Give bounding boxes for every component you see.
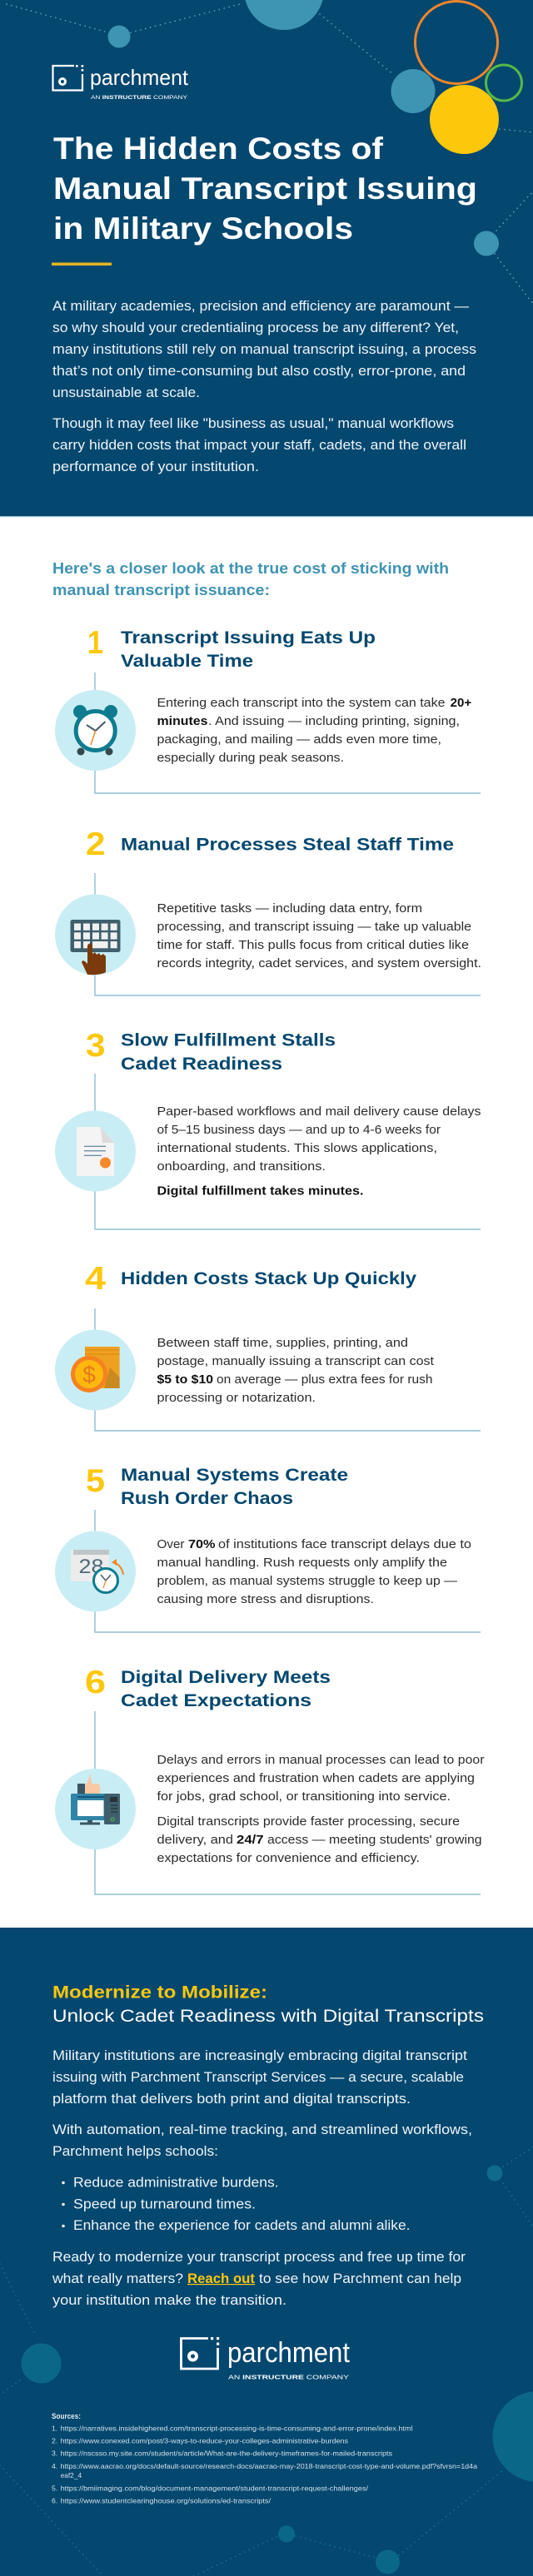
text: step 1: Entering each transcript into the system can take bbox=[157, 696, 445, 710]
panel: step 2 bbox=[55, 826, 481, 995]
heading: modernize to mobilize: Modernize to Mobilize: bbox=[52, 1983, 267, 2003]
title bbox=[53, 132, 477, 246]
text: step 6: Delays and errors in manual processes can lead to poor bbox=[157, 1753, 485, 1767]
icon: computer with thumbs up bbox=[55, 1769, 136, 1849]
panel: footer background bbox=[0, 1928, 533, 2576]
text: footer body: issuing with Parchment Transcript Services — a secure, scalable bbox=[52, 2070, 464, 2085]
text: step 3: Paper-based workflows and mail delivery cause delays bbox=[157, 1104, 481, 1119]
icon: calendar and clock bbox=[55, 1531, 136, 1611]
number 3: 3 bbox=[86, 1028, 105, 1064]
text: call to action bbox=[52, 2250, 466, 2308]
sources: 1. bbox=[52, 2425, 57, 2433]
section heading bbox=[52, 560, 449, 598]
text: step 6: experiences and frustration when cadets are applying bbox=[157, 1771, 475, 1785]
text: step 5: of institutions face transcript delays due to bbox=[218, 1537, 471, 1551]
intro text bbox=[52, 299, 476, 474]
icon: alarm clock bbox=[55, 690, 136, 771]
panel: step 3 bbox=[55, 1028, 481, 1229]
sources: 5. bbox=[52, 2484, 57, 2493]
sources: https://www.studentclearinghouse.org/solutions/ed-transcripts/ bbox=[61, 2497, 271, 2505]
sources: https://www.aacrao.org/docs/default-source/research-docs/aacrao-may-2018-transcript-cost-type-and-volume.pdf?sfvrsn=1d4a bbox=[61, 2462, 477, 2470]
bullet list: Speed up turnaround times. bbox=[73, 2197, 256, 2212]
sources: 6. bbox=[52, 2497, 57, 2505]
title: Manual Transcript Issuing bbox=[53, 171, 477, 206]
panel: step 1 bbox=[55, 625, 481, 793]
text: step 2 bbox=[157, 901, 481, 970]
intro text: At military academies, precision and efficiency are paramount — bbox=[52, 299, 470, 314]
text: step 1: packaging, and mailing — adds even more time, bbox=[157, 732, 441, 747]
logo: parchment top: AN INSTRUCTURE COMPANY bbox=[91, 96, 187, 101]
panel: step 4 bbox=[55, 1261, 481, 1431]
text: step 6 bbox=[157, 1753, 485, 1865]
heading: step 1: Valuable Time bbox=[121, 652, 253, 671]
text: step 6: access — meeting students' growing bbox=[267, 1833, 482, 1847]
sources: Sources: bbox=[52, 2412, 81, 2420]
text: footer body: With automation, real-time tracking, and streamlined workflows, bbox=[52, 2122, 472, 2137]
heading: modernize to mobilize: Unlock Cadet Readiness with Digital Transcripts bbox=[52, 2006, 484, 2026]
text: step 3 bbox=[157, 1104, 481, 1199]
intro text: unsustainable at scale. bbox=[52, 385, 200, 400]
text: step 3: of 5–15 business days — and up to 4-6 weeks for bbox=[157, 1123, 441, 1137]
panel: step 6 bbox=[55, 1665, 485, 1894]
text: step 5: manual handling. Rush requests only amplify the bbox=[157, 1556, 447, 1570]
intro text: performance of your institution. bbox=[52, 459, 259, 474]
sources: eaf2_4 bbox=[61, 2471, 82, 2479]
heading: step 5: Manual Systems Create bbox=[121, 1466, 348, 1485]
icon: keyboard and hand bbox=[55, 894, 136, 975]
icon: coins: $ bbox=[82, 1362, 96, 1387]
panel: step 5 bbox=[55, 1463, 481, 1632]
text: step 5: problem, as manual systems struggle to keep up — bbox=[157, 1574, 457, 1588]
text: step 3: Digital fulfillment takes minutes. bbox=[157, 1184, 363, 1199]
text: step 6: delivery, and bbox=[157, 1833, 233, 1847]
bullet list: Enhance the experience for cadets and alumni alike. bbox=[73, 2218, 410, 2233]
sources: 3. bbox=[52, 2449, 57, 2458]
title: in Military Schools bbox=[53, 211, 353, 246]
text: footer body: Military institutions are increasingly embracing digital transcript bbox=[52, 2048, 467, 2063]
text: step 3: international students. This slows applications, bbox=[157, 1141, 437, 1155]
intro text: many institutions still rely on manual transcript issuing, a process bbox=[52, 342, 476, 357]
title accent rule bbox=[52, 263, 112, 266]
number 4: 4 bbox=[85, 1261, 106, 1297]
sources: https://bmiimaging.com/blog/document-management/student-transcript-request-challenges/ bbox=[61, 2484, 369, 2493]
text: footer body: platform that delivers both print and digital transcripts. bbox=[52, 2092, 411, 2107]
text: step 6: 24/7 bbox=[237, 1833, 264, 1847]
heading: step 6: Digital Delivery Meets bbox=[121, 1668, 331, 1687]
heading: modernize to mobilize bbox=[52, 1983, 484, 2026]
icon: coins bbox=[55, 1330, 136, 1410]
text: step 4: processing or notarization. bbox=[157, 1391, 316, 1405]
sources bbox=[52, 2412, 477, 2505]
section heading: Here's a closer look at the true cost of sticking with bbox=[52, 560, 449, 577]
text: step 1 bbox=[157, 696, 471, 765]
heading: step 4: Hidden Costs Stack Up Quickly bbox=[121, 1269, 416, 1288]
title: The Hidden Costs of bbox=[53, 132, 384, 166]
text: step 6: for jobs, grad school, or transitioning into service. bbox=[157, 1789, 451, 1804]
text: step 3: onboarding, and transitions. bbox=[157, 1159, 326, 1174]
intro text: so why should your credentialing process be any different? Yet, bbox=[52, 320, 459, 335]
text: step 1: minutes bbox=[157, 714, 208, 728]
text: step 6: Digital transcripts provide faster processing, secure bbox=[157, 1814, 460, 1829]
text: step 6: expectations for convenience and efficiency. bbox=[157, 1851, 420, 1865]
heading: step 5: Rush Order Chaos bbox=[121, 1489, 293, 1508]
intro text: Though it may feel like "business as usual," manual workflows bbox=[52, 416, 454, 431]
number 5: 5 bbox=[86, 1463, 105, 1499]
text: call to action: Ready to modernize your transcript process and free up time for bbox=[52, 2250, 466, 2265]
intro text: carry hidden costs that impact your staff, cadets, and the overall bbox=[52, 438, 466, 453]
sources: 2. bbox=[52, 2437, 57, 2445]
heading: step 6: Cadet Expectations bbox=[121, 1691, 311, 1710]
text: step 4: Between staff time, supplies, printing, and bbox=[157, 1336, 408, 1350]
text: step 5: Over bbox=[157, 1537, 185, 1551]
sources: https://narratives.insidehighered.com/transcript-processing-is-time-consuming-and-error-prone/index.html bbox=[61, 2425, 413, 2433]
bullet list: Reduce administrative burdens. bbox=[73, 2176, 279, 2191]
heading: step 1 bbox=[121, 628, 376, 671]
number 1: 1 bbox=[87, 625, 103, 661]
sources: https://nscsso.my.site.com/student/s/article/What-are-the-delivery-timeframes-for-mailed-transcripts bbox=[61, 2449, 392, 2458]
heading: step 2: Manual Processes Steal Staff Time bbox=[121, 836, 454, 855]
text: step 2: records integrity, cadet services, and system oversight. bbox=[157, 956, 481, 970]
text: call to action: your institution make the transition. bbox=[52, 2293, 286, 2308]
text: footer body bbox=[52, 2048, 472, 2159]
text: call to action: Reach out bbox=[187, 2271, 256, 2286]
text: step 2: time for staff. This pulls focus from critical duties like bbox=[157, 938, 469, 952]
number 2: 2 bbox=[86, 826, 105, 862]
intro text: that’s not only time-consuming but also costly, error-prone, and bbox=[52, 364, 466, 379]
heading: step 6 bbox=[121, 1668, 331, 1710]
heading: step 3: Cadet Readiness bbox=[121, 1055, 282, 1074]
heading: step 3: Slow Fulfillment Stalls bbox=[121, 1031, 336, 1050]
text: step 1: especially during peak seasons. bbox=[157, 751, 344, 765]
logo: parchment footer: AN INSTRUCTURE COMPANY bbox=[228, 2374, 349, 2381]
sources: 4. bbox=[52, 2462, 57, 2470]
heading: step 3 bbox=[121, 1031, 336, 1074]
logo: parchment top: parchment bbox=[90, 65, 189, 90]
icon: document with seal bbox=[55, 1110, 136, 1192]
text: step 2: processing, and transcript issuing — take up valuable bbox=[157, 920, 471, 934]
text: step 2: Repetitive tasks — including data entry, form bbox=[157, 901, 422, 916]
text: step 4: $5 to $10 bbox=[157, 1372, 213, 1387]
text: call to action: what really matters? bbox=[52, 2271, 183, 2286]
text: footer body: Parchment helps schools: bbox=[52, 2144, 218, 2159]
text: step 5 bbox=[157, 1537, 471, 1606]
text: step 4: on average — plus extra fees for rush bbox=[217, 1372, 433, 1387]
logo: parchment footer: parchment bbox=[227, 2337, 351, 2369]
text: step 1: 20+ bbox=[451, 696, 471, 710]
panel: hero header bbox=[0, 0, 533, 517]
icon: calendar and clock: 28 bbox=[78, 1556, 103, 1578]
text: step 1: . And issuing — including printing, signing, bbox=[208, 714, 460, 728]
section heading: manual transcript issuance: bbox=[52, 582, 270, 598]
text: step 5: 70% bbox=[188, 1537, 215, 1551]
text: step 4 bbox=[157, 1336, 435, 1405]
bullet list bbox=[62, 2176, 410, 2233]
text: step 4: postage, manually issuing a transcript can cost bbox=[157, 1354, 435, 1368]
text: step 5: causing more stress and disruptions. bbox=[157, 1592, 374, 1606]
heading: step 5 bbox=[121, 1466, 348, 1508]
number 6: 6 bbox=[85, 1665, 106, 1700]
heading: step 1: Transcript Issuing Eats Up bbox=[121, 628, 376, 648]
logo: parchment top bbox=[53, 65, 189, 101]
text: call to action: to see how Parchment can help bbox=[259, 2271, 461, 2286]
logo: parchment footer bbox=[182, 2337, 351, 2381]
sources: https://www.conexed.com/post/3-ways-to-reduce-your-colleges-administrative-burdens bbox=[61, 2437, 348, 2445]
